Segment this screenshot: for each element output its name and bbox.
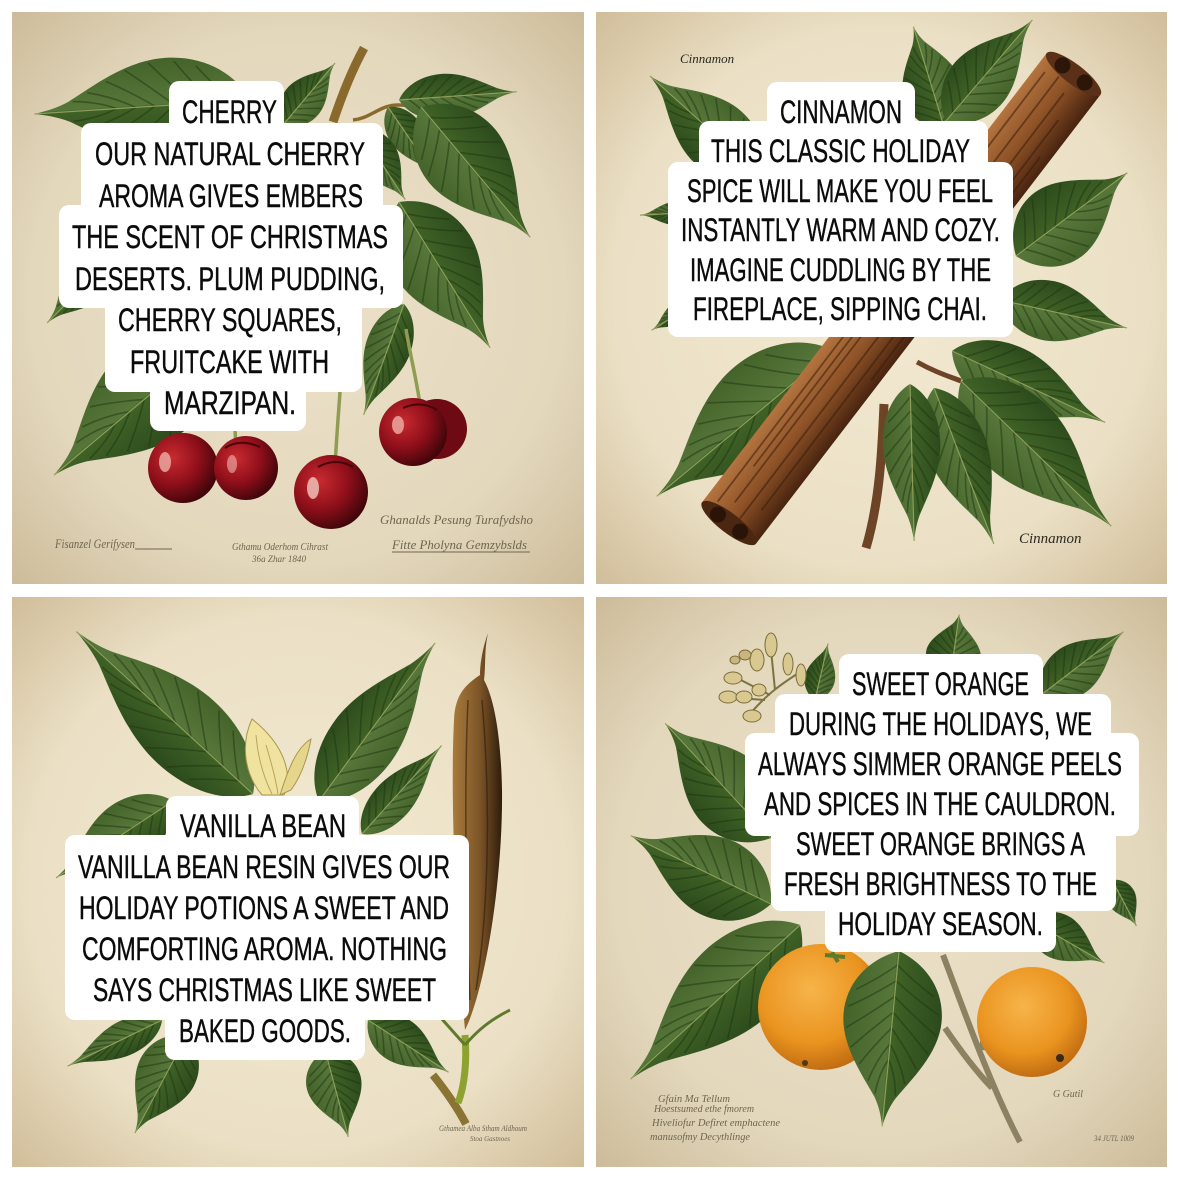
text block: cherry [59,81,403,431]
botanical caption: vanilla: Gthamea Alba Stham Aldhoum [439,1124,527,1133]
icon: vanilla flower [245,719,311,795]
panel background: cinnamon [596,12,1167,584]
illustration: cinnamon stick and leaves [625,0,1151,557]
text block: cherry: CHERRY SQUARES, [118,302,342,338]
text block: vanilla bean [65,796,469,1060]
panel background: vanilla bean [12,597,584,1167]
text block: cherry: AROMA GIVES EMBERS [99,178,363,214]
icon: cherries [148,398,467,529]
botanical captions: cinnamon [680,51,1082,547]
botanical captions: orange: 34 JUTL 1009 [1093,1134,1134,1143]
icon: right orange [977,967,1087,1077]
text block: vanilla bean: HOLIDAY POTIONS A SWEET AND [79,890,449,926]
illustration: cherry branch [22,48,563,529]
panel background: sweet orange [596,597,1167,1167]
botanical caption: vanilla: Stoa Gastnoes [470,1135,510,1143]
botanical captions: cinnamon: Cinnamon [680,51,734,66]
icon: branch [943,955,1040,1142]
text block: cinnamon [668,82,1013,337]
icon: cinnamon stick [696,45,1107,552]
text block: vanilla bean: BAKED GOODS. [179,1013,351,1049]
text block: cherry: OUR NATURAL CHERRY [95,136,365,172]
text block: sweet orange: HOLIDAY SEASON. [838,906,1043,942]
text block: cinnamon: THIS CLASSIC HOLIDAY [711,133,970,169]
botanical captions: orange [650,1089,1134,1143]
illustration: orange branch [600,611,1149,1142]
botanical captions: cherry: Fitte Pholyna Gemzybslds [391,537,527,552]
text block: vanilla bean: COMFORTING AROMA. NOTHING [82,931,447,967]
botanical captions: cinnamon: Cinnamon [1019,531,1082,547]
text block: sweet orange [745,654,1139,952]
botanical captions: cherry: Fisanzel Gerifysen [54,536,135,551]
botanical captions: orange: Hoestsumed ethe fmorem [653,1104,754,1115]
panel: vanilla bean [12,597,584,1167]
text block: vanilla bean: VANILLA BEAN [180,808,346,844]
text block: cherry: CHERRY [182,94,277,130]
text block: cinnamon: INSTANTLY WARM AND COZY. [681,212,1000,248]
panel: cinnamon [596,0,1167,584]
text block: cinnamon: CINNAMON [780,94,902,130]
text block: cherry: THE SCENT OF CHRISTMAS [72,219,388,255]
botanical captions: cherry: 36a Zhar 1840 [251,554,306,564]
panel: cherry [12,12,584,584]
text block: cherry: FRUITCAKE WITH [130,344,329,380]
botanical captions: cherry: Ghanalds Pesung Turafydsho [380,512,533,527]
botanical caption: vanilla [439,1124,527,1143]
panel background: cherry [12,12,584,584]
icon: vanilla pod [433,633,510,1124]
botanical captions: cherry: Gthamu Oderhom Cihrast [232,542,328,553]
text block: cinnamon: IMAGINE CUDDLING BY THE [690,252,991,288]
text block: sweet orange: SWEET ORANGE [852,666,1029,702]
icon: blossom cluster [719,633,806,722]
text block: cinnamon: SPICE WILL MAKE YOU FEEL [687,173,993,209]
text block: cherry: MARZIPAN. [164,385,296,421]
text block: cherry: DESERTS. PLUM PUDDING, [75,261,385,297]
panel: sweet orange [596,597,1167,1167]
text block: vanilla bean: SAYS CHRISTMAS LIKE SWEET [93,972,436,1008]
botanical captions: cherry [54,512,533,564]
icon: left orange [758,944,884,1070]
text block: vanilla bean: VANILLA BEAN RESIN GIVES OUR [78,849,450,885]
botanical captions: orange: Hiveliofur Defiret emphactene [651,1118,781,1129]
botanical captions: orange: manusofmy Decythlinge [650,1132,751,1143]
botanical captions: orange: G Gutil [1053,1089,1083,1100]
botanical captions: orange: Gfain Ma Tellum [658,1094,730,1105]
illustration: vanilla leaves, flower and pod [40,601,510,1147]
text block: cinnamon: FIREPLACE, SIPPING CHAI. [693,291,987,327]
